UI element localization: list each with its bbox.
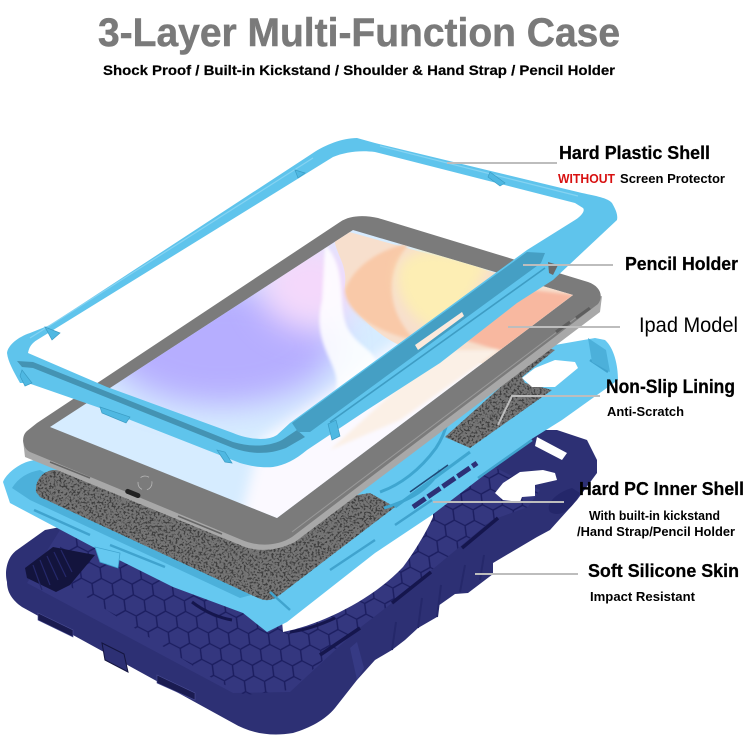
screen [50, 230, 573, 518]
pencil holder channel [292, 252, 545, 432]
pencil holder latch [548, 262, 558, 275]
label: non-slip lining: Anti-Scratch [607, 404, 684, 419]
wallpaper lavender [107, 285, 337, 405]
leader: hard PC inner shell [433, 501, 564, 503]
label: hard plastic shell [558, 143, 725, 186]
side buttons [549, 488, 580, 514]
leader: pencil holder [523, 264, 613, 266]
layer: soft silicone skin [6, 430, 597, 735]
home button mark [138, 476, 152, 490]
frame clips [20, 170, 305, 463]
layer: tablet [23, 216, 602, 550]
pencil holder slit [415, 312, 464, 350]
hexagon tread [60, 440, 540, 695]
tablet rim line [292, 307, 590, 532]
pencil holder rib [330, 268, 545, 422]
wallpaper white band [319, 245, 378, 395]
label: hard PC inner shell: Hard PC Inner Shell [579, 479, 744, 499]
shell inner wall [12, 470, 270, 598]
label: hard plastic shell: WITHOUT [558, 171, 615, 186]
camera hole [522, 360, 578, 387]
label: soft silicone skin: Soft Silicone Skin [588, 561, 739, 581]
label: hard PC inner shell: With built-in kickstand [589, 508, 720, 523]
floor arcs [192, 590, 360, 632]
circular cutout [280, 495, 433, 632]
speaker grille left [38, 613, 73, 637]
dark recess [25, 547, 95, 592]
side slot lines [320, 518, 498, 655]
usb port [124, 488, 141, 499]
side buttons [556, 308, 590, 332]
wallpaper salmon [468, 290, 573, 351]
title: 3-Layer Multi-Function Case [98, 11, 620, 55]
top window [535, 437, 567, 460]
speaker line left [50, 462, 90, 478]
label: non-slip lining: Non-Slip Lining [606, 377, 735, 398]
label: ipad model: Ipad Model [639, 314, 738, 337]
side bumps [392, 555, 484, 650]
lining rear [445, 347, 555, 448]
pencil holder clip [328, 420, 340, 440]
camera cutout [495, 470, 557, 502]
frame body [7, 138, 617, 467]
wallpaper orange [345, 243, 415, 340]
lip step [350, 642, 364, 680]
wallpaper lower white [239, 328, 528, 518]
leader: hard plastic shell [447, 162, 557, 164]
speaker grille right [157, 675, 195, 700]
label: hard PC inner shell [577, 479, 744, 539]
rim ribs [34, 360, 608, 610]
wallpaper cream band [330, 350, 500, 450]
label: hard plastic shell: Hard Plastic Shell [559, 143, 710, 163]
raised floor [27, 440, 540, 693]
strap slot [102, 643, 128, 672]
leader: soft silicone skin [475, 573, 578, 575]
label: non-slip lining [606, 377, 735, 419]
label: soft silicone skin: Impact Resistant [590, 589, 696, 604]
frame dark band [17, 361, 305, 453]
tablet face [23, 216, 601, 545]
label: hard PC inner shell: /Hand Strap/Pencil Holder [577, 524, 735, 539]
shell body [3, 338, 618, 632]
kickstand arc [380, 420, 470, 508]
lining front [36, 470, 395, 600]
label: pencil holder: Pencil Holder [625, 254, 738, 274]
leader: non-slip lining [498, 396, 600, 425]
top clips [488, 172, 505, 186]
shell bottom tab [95, 547, 120, 568]
speaker line right [178, 516, 222, 534]
silicone body [6, 430, 597, 735]
recess ribs [33, 550, 72, 590]
label: soft silicone skin [588, 561, 739, 604]
layer: hard plastic shell [7, 138, 617, 467]
layer: hard PC inner shell [3, 338, 618, 632]
subtitle: Shock Proof / Built-in Kickstand / Shoulder & Hand Strap / Pencil Holder [103, 62, 616, 78]
wallpaper pink [260, 240, 360, 330]
leader: ipad model [508, 326, 620, 328]
wallpaper peach [334, 228, 575, 365]
label: hard plastic shell: Screen Protector [620, 171, 725, 186]
wallpaper yellow [398, 251, 490, 335]
strap slot [413, 463, 477, 507]
tablet edge [23, 296, 602, 550]
camera bump wall [588, 338, 610, 372]
frame highlight [30, 146, 578, 338]
kickstand slit [410, 465, 448, 492]
